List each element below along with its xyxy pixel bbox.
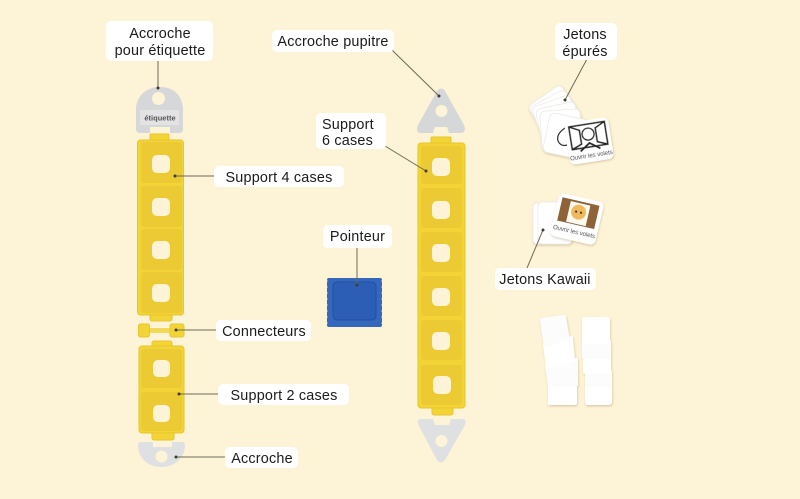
label: accroche pour etiquette: pour étiquette (115, 43, 205, 59)
leader: support 4 cases (174, 174, 214, 178)
label: support 2 cases (218, 384, 349, 405)
label: accroche pour etiquette (106, 21, 213, 61)
part: lower triangle hook (418, 419, 466, 462)
leader: accroche pour etiquette (156, 61, 160, 90)
leader: connecteurs (174, 328, 216, 332)
tokens: kawaii stack (533, 202, 572, 244)
part: label hook: étiquette (144, 114, 176, 122)
token: open shutters line art (564, 117, 614, 165)
leader: jetons epures (564, 59, 587, 102)
part: blue pointer (327, 278, 382, 327)
label: support 6 cases: Support (322, 117, 374, 133)
part: bottom hook (138, 442, 185, 467)
part: desk hook (417, 88, 465, 133)
label: accroche (225, 447, 298, 468)
label: pointeur: Pointeur (330, 229, 385, 245)
label: jetons epures: épurés (562, 44, 608, 60)
part: connectors (138, 324, 184, 337)
label: support 4 cases: Support 4 cases (226, 170, 332, 186)
label: support 6 cases: 6 cases (322, 133, 373, 149)
label: support 6 cases (316, 113, 386, 149)
label: jetons epures (555, 23, 617, 60)
label: support 4 cases (214, 166, 344, 187)
label: support 2 cases: Support 2 cases (230, 388, 338, 404)
label: accroche pupitre: Accroche pupitre (277, 34, 389, 50)
label: jetons epures: Jetons (563, 27, 607, 43)
token: kawaii character (550, 192, 604, 246)
leader: support 2 cases (178, 392, 218, 396)
label: connecteurs (216, 320, 311, 341)
token: open shutters line art: Ouvrir les volets (570, 150, 613, 163)
label: connecteurs: Connecteurs (222, 324, 306, 340)
label: accroche pour etiquette: Accroche (129, 26, 191, 42)
leader: accroche (174, 456, 225, 458)
leader: jetons kawaii (527, 228, 544, 268)
label: jetons kawaii (495, 268, 596, 290)
part: 4-cell support (138, 134, 184, 321)
tokens: blank column right (582, 317, 612, 405)
token: kawaii character: Ouvrir les volets (552, 225, 595, 240)
part: 2-cell support (139, 341, 184, 440)
leader: support 6 cases (385, 146, 428, 172)
label: accroche: Accroche (231, 451, 293, 467)
leader: pointeur (356, 248, 358, 286)
label: jetons kawaii: Jetons Kawaii (499, 272, 591, 288)
part: 6-cell support (418, 137, 465, 415)
label: pointeur (323, 225, 392, 248)
part: label hook (136, 87, 183, 133)
tokens: blank column left (540, 315, 578, 405)
leader: accroche pupitre (392, 50, 440, 98)
label: accroche pupitre (272, 30, 394, 52)
tokens: plain fan (527, 84, 590, 160)
